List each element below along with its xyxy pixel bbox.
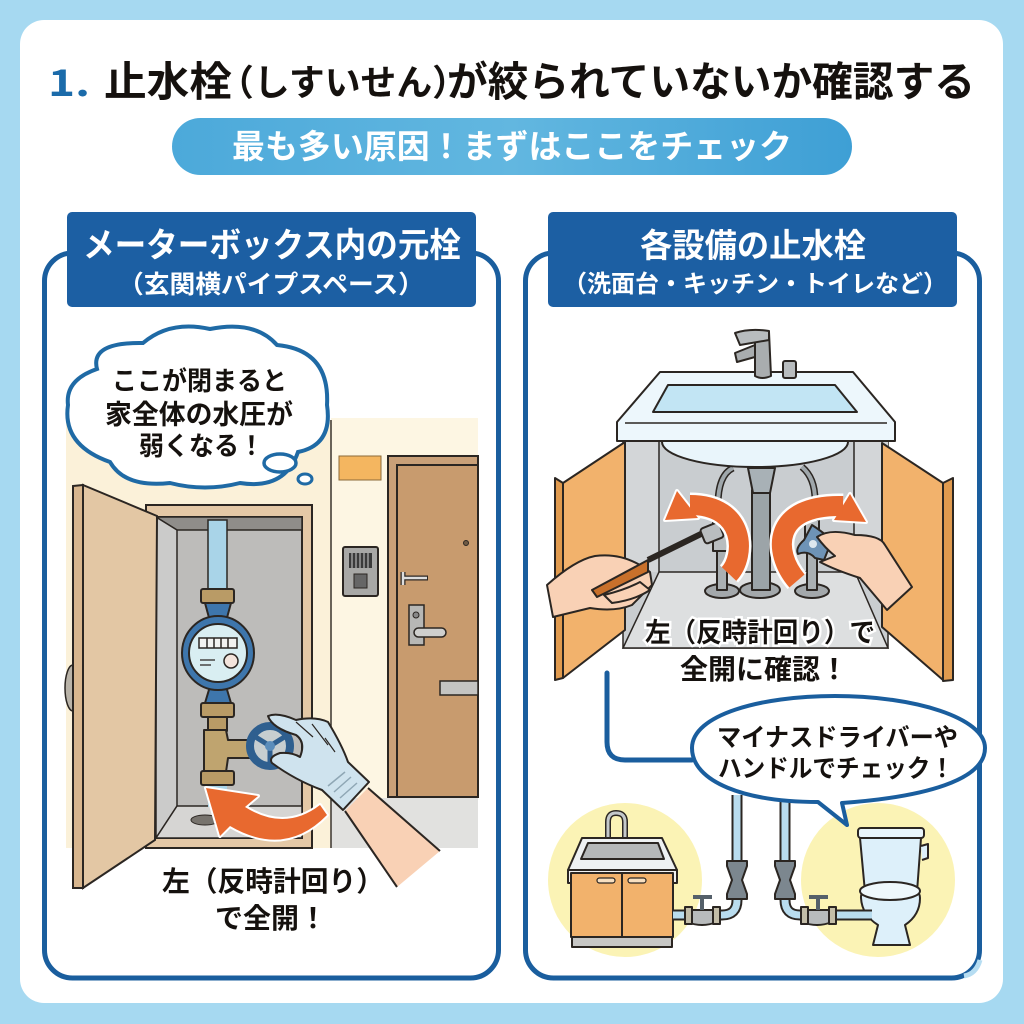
panel heading right <box>548 212 957 307</box>
illustration: cabinet doors <box>555 442 953 681</box>
panel heading right: 各設備の止水栓 <box>640 219 866 267</box>
illustration: gloved hand <box>268 715 440 887</box>
panel heading left: メーターボックス内の元栓 <box>83 218 461 267</box>
callout: speech bubble: マイナスドライバーや <box>717 718 958 754</box>
callout: thought bubble: 家全体の水圧が <box>105 393 293 432</box>
illustration: under-sink cabinet <box>623 440 888 648</box>
icon: nameplate <box>339 456 381 480</box>
text: right instruction <box>645 611 875 688</box>
icon: intercom <box>343 547 378 596</box>
arrow: counterclockwise left <box>206 788 327 840</box>
illustration: washbasin <box>617 372 895 467</box>
panel: water meter box <box>44 212 498 978</box>
text: right instruction: 左（反時計回り）で <box>645 611 875 650</box>
illustration: water pipe and meter <box>182 520 254 807</box>
panel frame right <box>526 253 980 978</box>
callout: thought bubble: 弱くなる！ <box>139 426 264 463</box>
title: 1. <box>48 55 90 107</box>
illustration: gate valve <box>201 717 290 785</box>
callout: thought bubble: ここが閉まると <box>112 361 287 398</box>
illustration: hallway wall <box>66 418 478 848</box>
illustration: supply pipes and valves <box>673 795 872 925</box>
illustration: kitchen vanity <box>568 813 677 947</box>
illustration: toilet <box>858 828 928 945</box>
title: 止水栓 <box>104 48 232 108</box>
illustration: entrance door <box>388 456 478 797</box>
illustration: meter cabinet <box>146 505 312 848</box>
panel heading left <box>67 212 476 307</box>
panel heading right: （洗面台・キッチン・トイレなど） <box>563 264 947 299</box>
subtitle pill <box>172 118 852 175</box>
illustration: hand on knob <box>797 525 912 610</box>
text: left instruction: で全開！ <box>215 897 327 937</box>
illustration: cabinet door <box>65 485 157 888</box>
callout: speech bubble <box>692 696 985 825</box>
title: が絞られていないか確認する <box>447 48 975 108</box>
title: （しすいせん） <box>218 54 468 106</box>
connector line <box>607 673 692 760</box>
arrow: right ring <box>782 494 866 581</box>
arrow: left counterclockwise ring <box>665 491 739 574</box>
panel heading left: （玄関横パイプスペース） <box>118 265 424 301</box>
subtitle pill: 最も多い原因！まずはここをチェック <box>232 120 792 168</box>
panel: each fixture valve <box>526 212 985 978</box>
illustration: hand with screwdriver <box>547 522 724 617</box>
illustration: plumbing under sink <box>705 467 829 598</box>
title <box>48 48 975 108</box>
text: left instruction: 左（反時計回り） <box>162 860 384 900</box>
callout: thought bubble <box>67 326 328 488</box>
icon: yellow circles <box>548 803 955 957</box>
panel frame left <box>44 253 498 978</box>
callout: speech bubble: ハンドルでチェック！ <box>718 749 954 785</box>
text: right instruction: 全開に確認！ <box>680 648 848 688</box>
text: left instruction <box>162 860 384 937</box>
corner accent <box>964 960 980 976</box>
icon: faucet <box>735 330 796 378</box>
